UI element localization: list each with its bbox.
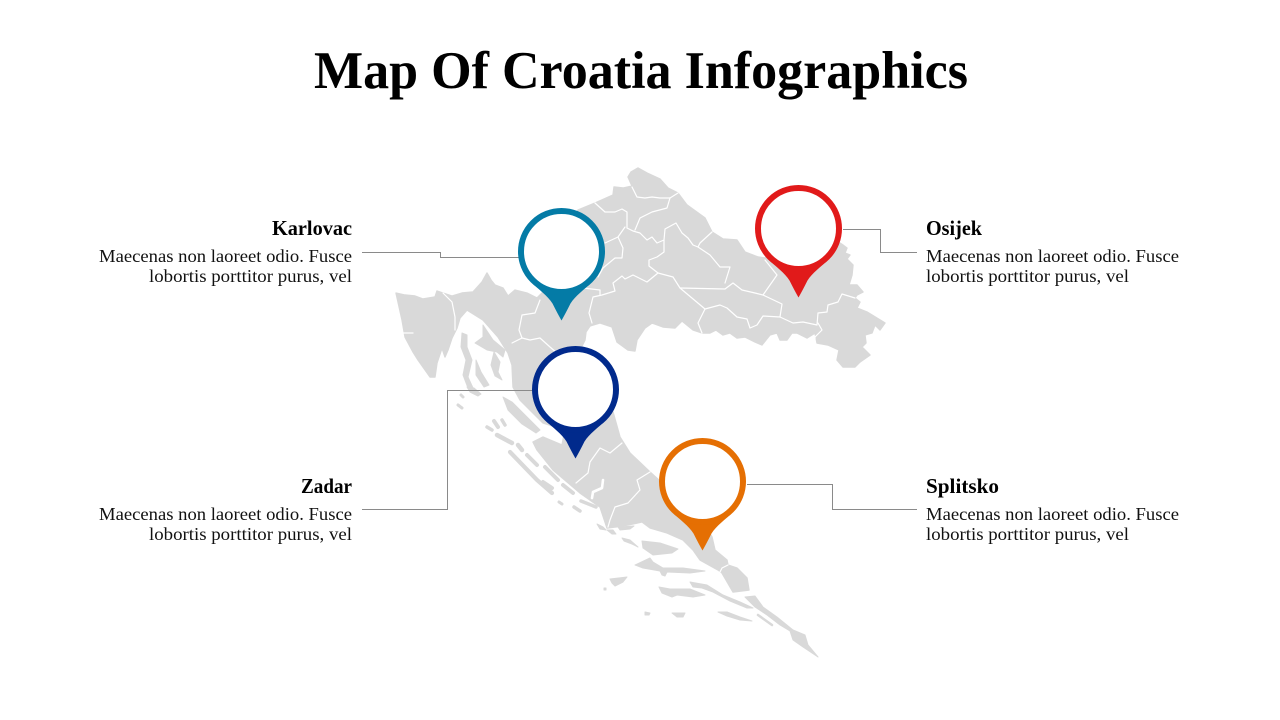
text block: Splitsko <box>926 474 1179 544</box>
connector: Zadar <box>362 390 533 510</box>
pin: Osijek red <box>758 188 839 298</box>
text block: Zadar: Zadar <box>301 474 352 498</box>
islands <box>461 325 818 657</box>
pin: Karlovac teal <box>521 211 602 320</box>
county borders <box>403 187 855 572</box>
connector: Splitsko <box>747 484 917 510</box>
text block: Karlovac: lobortis porttitor purus, vel <box>149 266 352 286</box>
pin: Zadar navy <box>535 349 616 458</box>
text block: Karlovac <box>99 216 352 286</box>
text block: Splitsko: Splitsko <box>926 474 999 498</box>
text block: Splitsko: lobortis porttitor purus, vel <box>926 524 1129 544</box>
text block: Osijek <box>926 216 1179 286</box>
text block: Osijek: Osijek <box>926 216 982 240</box>
text block: Osijek: Maecenas non laoreet odio. Fusce <box>926 246 1179 266</box>
text block: Karlovac: Karlovac <box>272 216 352 240</box>
text block: Osijek: lobortis porttitor purus, vel <box>926 266 1129 286</box>
text block: Karlovac: Maecenas non laoreet odio. Fusce <box>99 246 352 266</box>
text block: Zadar: lobortis porttitor purus, vel <box>149 524 352 544</box>
text block: Zadar: Maecenas non laoreet odio. Fusce <box>99 504 352 524</box>
mainland <box>396 168 885 592</box>
text block: Splitsko: Maecenas non laoreet odio. Fusce <box>926 504 1179 524</box>
pin: Splitsko orange <box>662 441 743 550</box>
connector: Karlovac <box>362 252 519 258</box>
connector: Osijek <box>843 230 917 252</box>
title: Map Of Croatia Infographics <box>314 42 968 100</box>
text block: Zadar <box>99 474 352 544</box>
map of Croatia <box>396 168 885 657</box>
